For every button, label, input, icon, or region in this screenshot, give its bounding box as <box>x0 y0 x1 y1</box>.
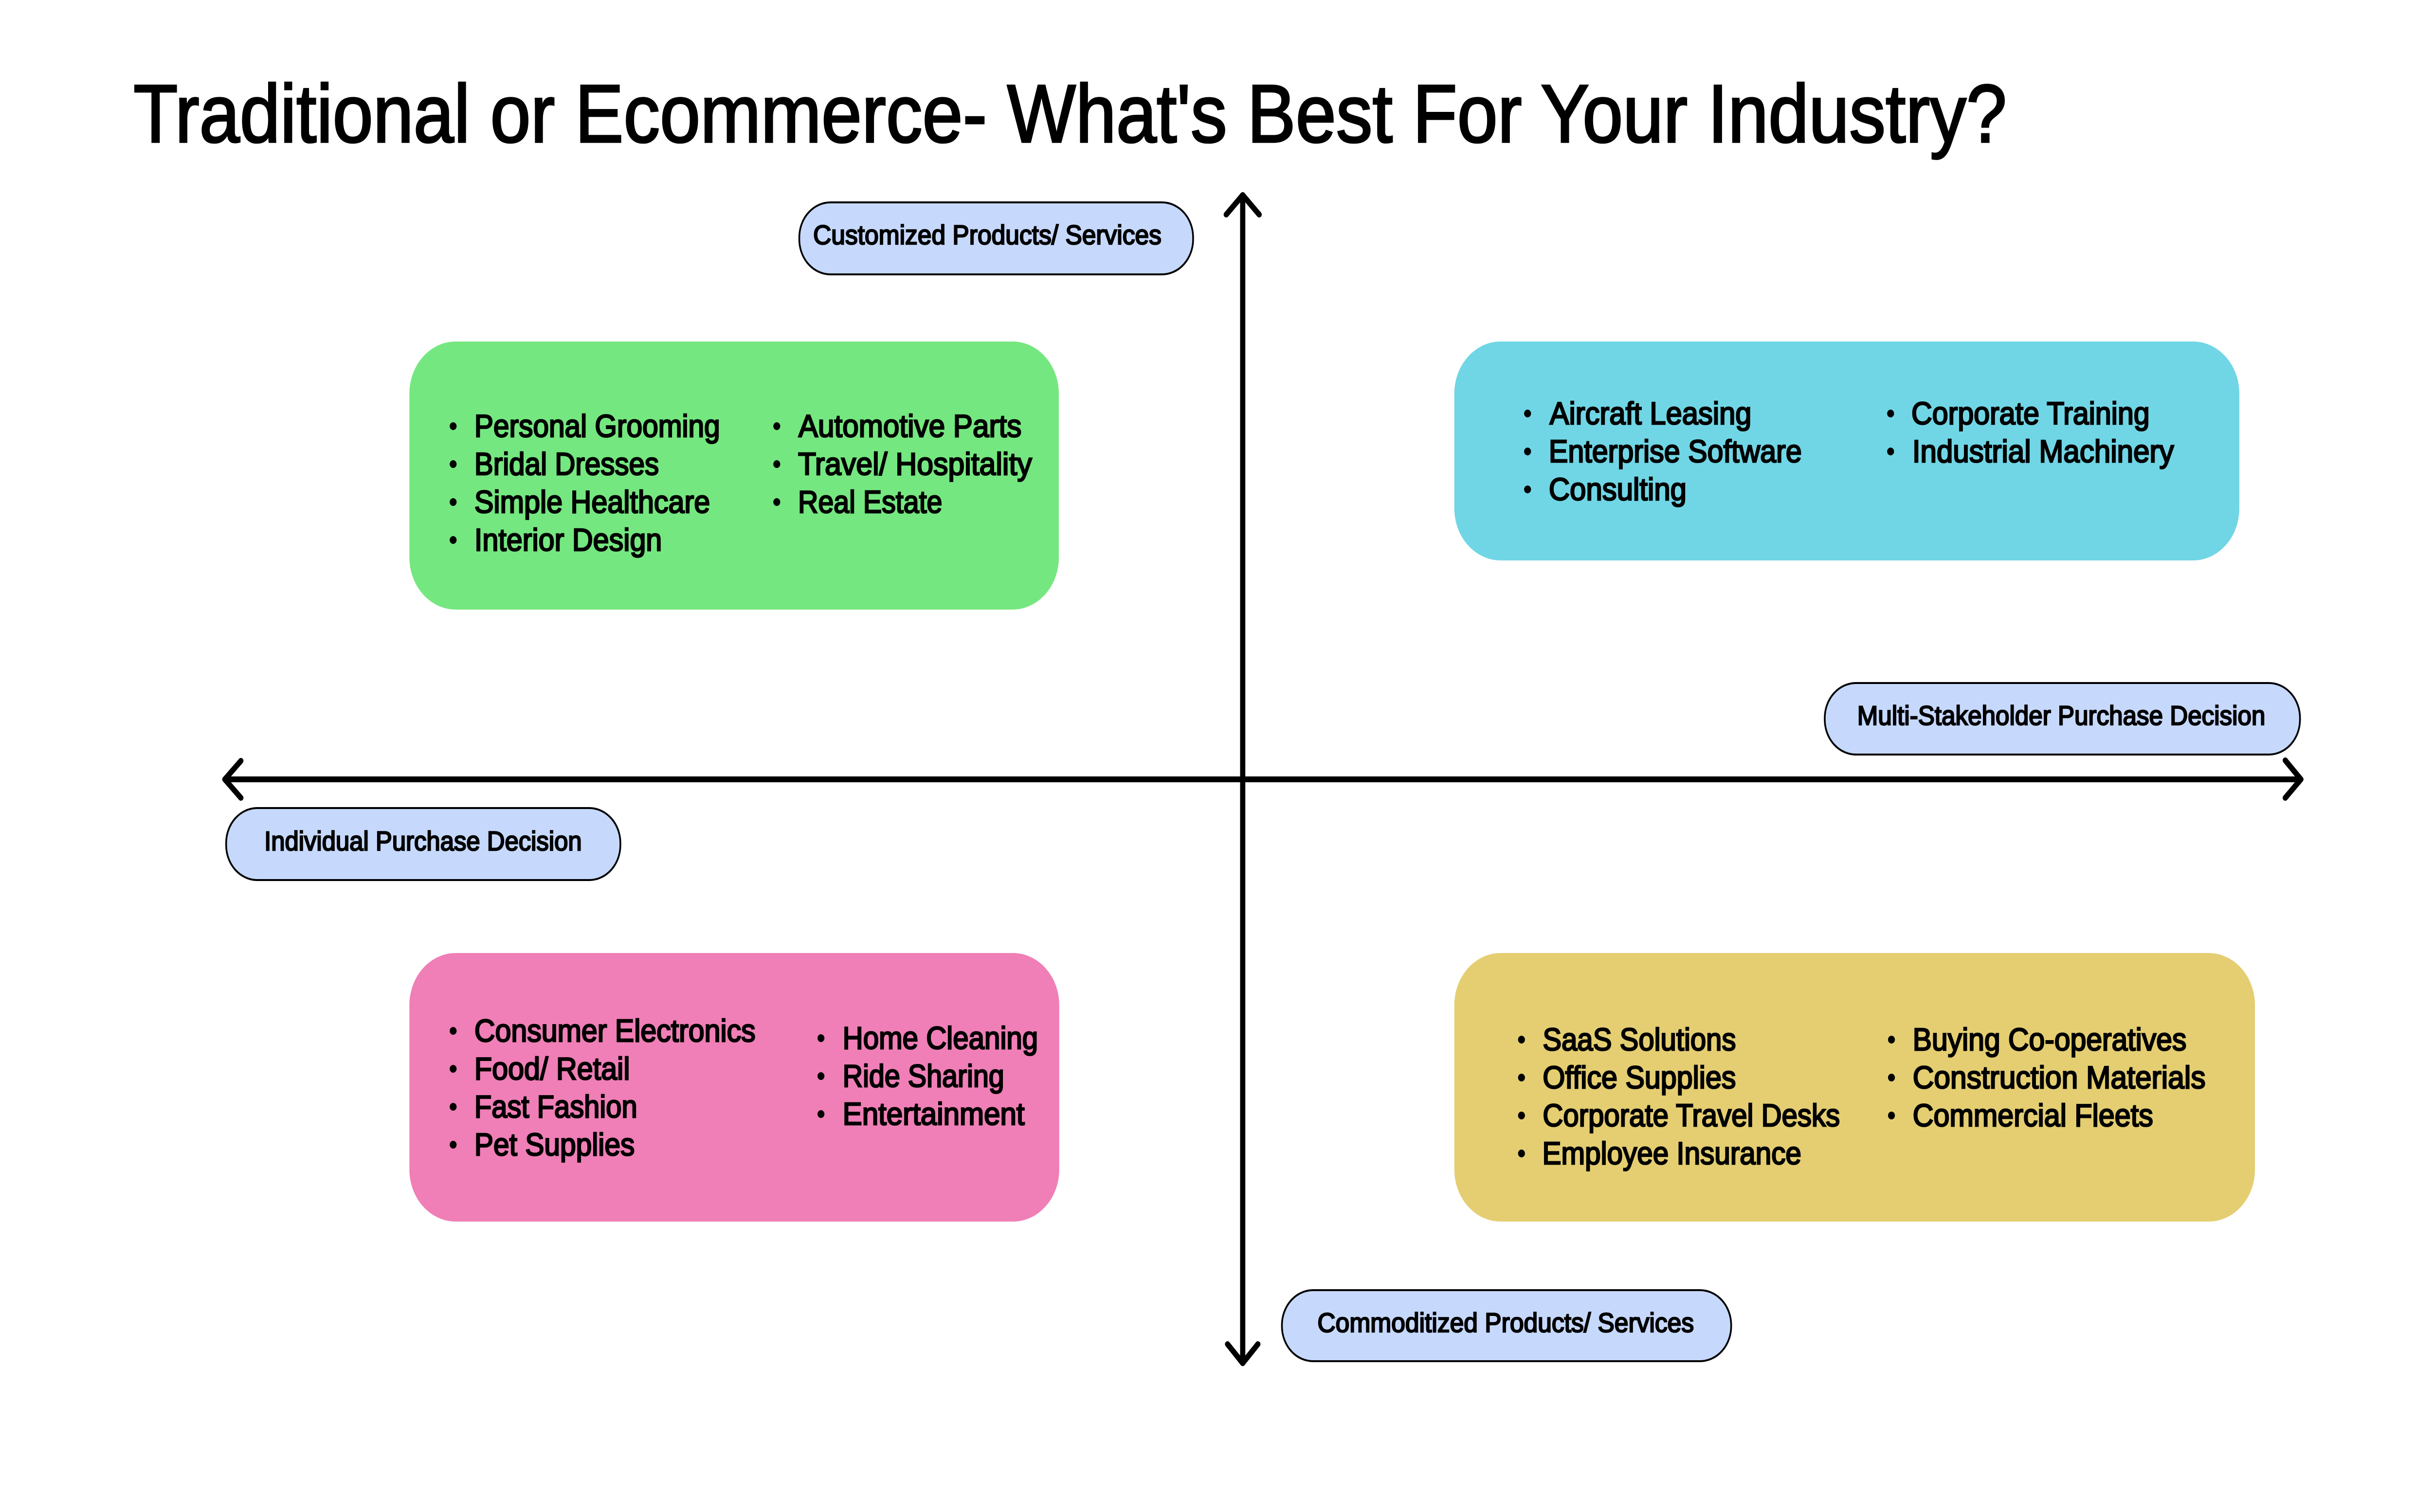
panel: green quadrant: Travel/ Hospitality <box>798 447 1032 482</box>
vertical axis arrow <box>1226 195 1259 1363</box>
panel: green quadrant: Personal Grooming <box>474 409 720 444</box>
panel: yellow quadrant <box>1454 953 2255 1222</box>
panel: pink quadrant: Entertainment <box>843 1097 1025 1132</box>
panel: green quadrant: Bridal Dresses <box>474 447 659 482</box>
panel: pink quadrant: Home Cleaning <box>843 1021 1038 1056</box>
panel: green quadrant: Real Estate <box>798 485 942 520</box>
horizontal axis arrow <box>225 760 2301 798</box>
panel: yellow quadrant: Commercial Fleets <box>1913 1098 2153 1134</box>
panel: pink quadrant: Fast Fashion <box>474 1089 637 1125</box>
pill: multi-stakeholder: Multi-Stakeholder Purchase Decision <box>1857 701 2265 731</box>
pill: commoditized: Commoditized Products/ Services <box>1317 1308 1694 1338</box>
panel: yellow quadrant: Employee Insurance <box>1543 1136 1801 1171</box>
pill: customized products: Customized Products/ Services <box>813 220 1162 251</box>
panel: blue quadrant: Consulting <box>1549 472 1687 507</box>
pill: customized products <box>799 202 1193 274</box>
panel: yellow quadrant: SaaS Solutions <box>1543 1022 1736 1058</box>
panel: yellow quadrant: Corporate Travel Desks <box>1543 1098 1840 1134</box>
panel: blue quadrant: Corporate Training <box>1911 396 2150 432</box>
panel: green quadrant: Interior Design <box>474 522 662 558</box>
panel: green quadrant <box>409 342 1059 610</box>
panel: pink quadrant: Ride Sharing <box>843 1059 1004 1094</box>
pill: individual: Individual Purchase Decision <box>264 826 582 857</box>
panel: green quadrant: Simple Healthcare <box>474 485 710 520</box>
panel: yellow quadrant: Construction Materials <box>1913 1060 2206 1096</box>
pill: multi-stakeholder <box>1825 683 2300 755</box>
pill: individual <box>226 808 620 880</box>
panel: pink quadrant: Consumer Electronics <box>474 1013 756 1049</box>
panel: pink quadrant: Food/ Retail <box>474 1051 630 1087</box>
title: Traditional or Ecommerce- What's Best For Your Industry? <box>133 68 2007 160</box>
panel: blue quadrant: Industrial Machinery <box>1912 434 2174 469</box>
panel: blue quadrant: Enterprise Software <box>1549 434 1802 469</box>
panel: pink quadrant <box>409 953 1059 1222</box>
panel: green quadrant: Automotive Parts <box>799 409 1021 444</box>
panel: blue quadrant: Aircraft Leasing <box>1550 396 1752 432</box>
pill: commoditized <box>1282 1290 1731 1361</box>
panel: yellow quadrant: Buying Co-operatives <box>1913 1022 2186 1058</box>
panel: yellow quadrant: Office Supplies <box>1543 1060 1736 1096</box>
panel: pink quadrant: Pet Supplies <box>474 1127 635 1163</box>
panel: blue quadrant <box>1454 342 2239 560</box>
